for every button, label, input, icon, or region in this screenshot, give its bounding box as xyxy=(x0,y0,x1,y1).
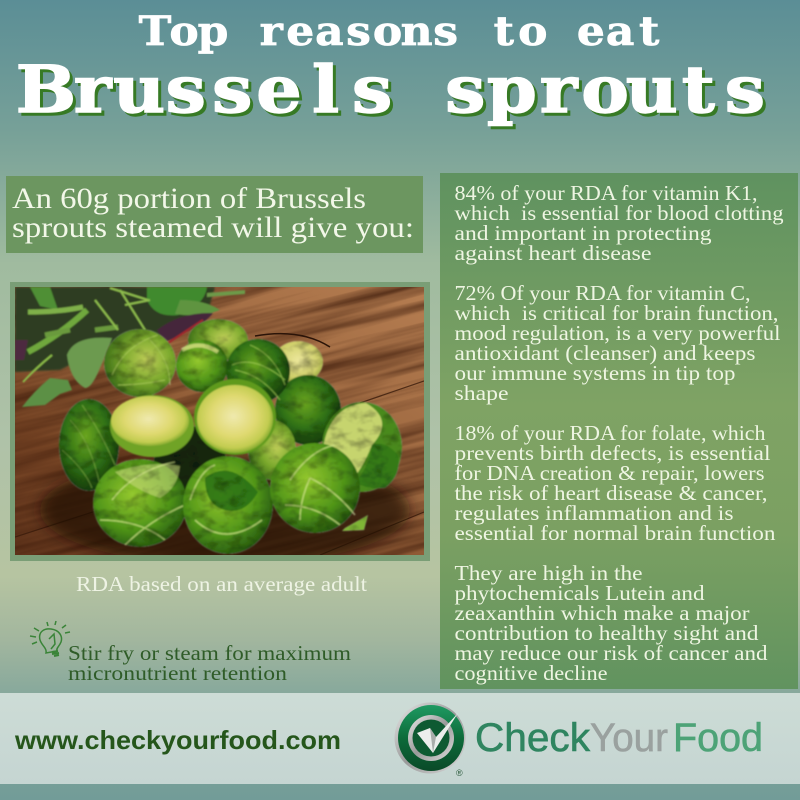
footer band xyxy=(0,693,800,784)
text block: vitamin C: antioxidant (cleanser) and keeps xyxy=(454,341,756,365)
text block: vitamin K1: which is essential for blood clotting xyxy=(454,201,784,225)
text block: folate: the risk of heart disease & cancer, xyxy=(454,481,768,505)
text block: vitamin K1: against heart disease xyxy=(454,241,652,265)
intro text xyxy=(12,182,414,244)
text block: vitamin K1: and important in protecting xyxy=(454,221,712,245)
text block: vitamin C: 72% Of your RDA for vitamin C, xyxy=(454,281,750,305)
tip text: Stir fry or steam for maximum xyxy=(68,641,351,665)
sprout: dark centre right xyxy=(226,339,290,403)
caption: RDA note: RDA based on an average adult xyxy=(76,572,367,596)
text block: folate: 18% of your RDA for folate, which xyxy=(454,421,766,445)
text block: folate: prevents birth defects, is essential xyxy=(454,441,771,465)
text block: lutein and zeaxanthin: cognitive decline xyxy=(454,661,608,685)
panel: portion intro xyxy=(6,176,423,253)
logo wordmark: Your xyxy=(590,716,668,760)
title line shadow: Brussels sprouts xyxy=(19,55,768,131)
text block: vitamin C: which is critical for brain function, xyxy=(454,301,778,325)
tip text xyxy=(68,641,351,685)
logo wordmark xyxy=(475,716,763,760)
text block: vitamin K1 xyxy=(454,181,784,265)
text block: lutein and zeaxanthin xyxy=(454,561,768,685)
sprout: cut left xyxy=(110,395,194,457)
text block: folate: essential for normal brain function xyxy=(454,521,776,545)
logo wordmark: Check xyxy=(475,716,591,760)
back sprouts xyxy=(188,319,248,361)
sprout: top centre xyxy=(176,340,228,392)
text block: folate xyxy=(454,421,776,545)
logo icon xyxy=(394,702,466,774)
sprout: bottom right xyxy=(270,443,360,533)
wood table xyxy=(15,287,424,555)
title xyxy=(16,8,768,131)
sprout: left xyxy=(59,399,119,491)
website URL: www.checkyourfood.com xyxy=(14,725,341,755)
text block: lutein and zeaxanthin: They are high in the xyxy=(454,561,642,585)
text block: lutein and zeaxanthin: zeaxanthin which make a major xyxy=(454,601,750,625)
text block: lutein and zeaxanthin: contribution to healthy sight and xyxy=(454,621,759,645)
logo wordmark: Food xyxy=(673,716,763,760)
text block: lutein and zeaxanthin: may reduce our risk of cancer and xyxy=(454,641,768,665)
text block: vitamin K1: 84% of your RDA for vitamin K1, xyxy=(454,181,758,205)
text block: folate: regulates inflammation and is xyxy=(454,501,734,525)
sprout: bottom left xyxy=(93,459,187,547)
text block: folate: for DNA creation & repair, lowers xyxy=(454,461,764,485)
sprout: top left xyxy=(104,329,176,397)
text block: vitamin C: our immune systems in tip top xyxy=(454,361,736,385)
text block: lutein and zeaxanthin: phytochemicals Lutein and xyxy=(454,581,705,605)
sprout: cut centre xyxy=(194,379,276,455)
text block: vitamin C xyxy=(454,281,781,405)
registered mark: ® xyxy=(456,768,463,778)
text block: vitamin C: shape xyxy=(454,381,508,405)
sprouts cluster xyxy=(59,319,402,554)
tip text: micronutrient retention xyxy=(68,661,288,685)
salad leaves xyxy=(15,287,245,407)
shadow under sprouts xyxy=(40,455,410,565)
photo: Brussels sprouts on wooden table xyxy=(10,282,430,561)
intro text: sprouts steamed will give you: xyxy=(12,211,414,244)
intro text: An 60g portion of Brussels xyxy=(12,182,366,215)
text block: vitamin C: mood regulation, is a very powerful xyxy=(454,321,781,345)
sprout: right xyxy=(322,402,402,492)
sprout: bottom centre xyxy=(183,456,273,554)
title line: Top reasons to eat: Top reasons to eat xyxy=(139,8,660,55)
panel: nutrient benefits xyxy=(440,173,798,689)
title line: Brussels sprouts: Brussels sprouts xyxy=(16,52,765,128)
icon: light bulb xyxy=(30,621,70,656)
